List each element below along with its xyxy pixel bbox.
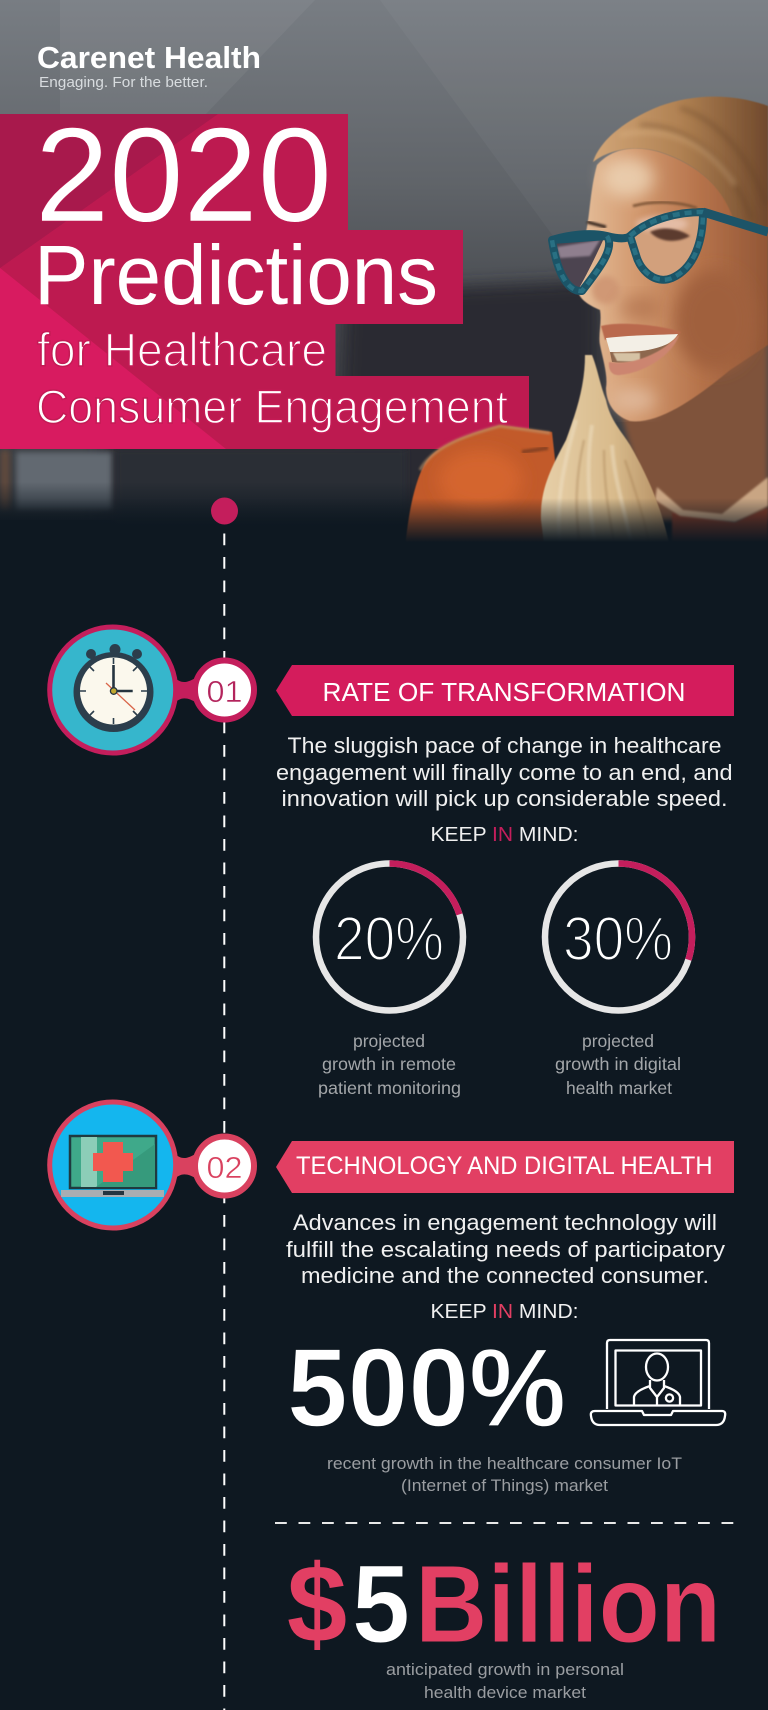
caption: digital health market: health market [566, 1078, 672, 1098]
keep in mind label 1: KEEP IN MIND: [430, 823, 578, 846]
ring chart: 30%: 30% [563, 905, 673, 974]
section 01 description: innovation will pick up considerable speed. [282, 786, 728, 811]
number badge 01 [195, 660, 254, 720]
header photo background [0, 0, 768, 560]
title text: Predictions [34, 228, 438, 322]
section 02 description: Advances in engagement technology will [293, 1210, 717, 1235]
number badge 02: 02 [206, 1150, 242, 1185]
title text: Consumer Engagement [36, 380, 508, 433]
caption: personal health device market [386, 1661, 624, 1702]
section 02 description: medicine and the connected consumer. [301, 1263, 709, 1288]
caption: remote patient monitoring: projected [353, 1031, 425, 1051]
blonde hair [540, 354, 668, 540]
caption: digital health market: growth in digital [555, 1054, 681, 1074]
ring chart: 20% [316, 864, 463, 1010]
caption: IoT market [327, 1455, 682, 1495]
teal circle [50, 627, 176, 753]
section 02 description: fulfill the escalating needs of participatory [286, 1237, 725, 1262]
title text [34, 101, 508, 433]
big stat: $5 Billion: Billion [415, 1543, 721, 1666]
photo bottom fade [0, 498, 768, 572]
collar and right sweater [654, 476, 768, 538]
section 02 description [286, 1210, 725, 1288]
title pink block [0, 114, 529, 449]
title text: 2020 [35, 101, 332, 250]
big stat: $5 Billion: 5 [352, 1543, 410, 1666]
caption: remote patient monitoring: patient monitoring [318, 1078, 461, 1098]
logo: Carenet Health: Carenet Health [37, 40, 261, 75]
number badge 01: 01 [206, 674, 242, 709]
number badge 02 [195, 1136, 254, 1196]
hair top [593, 97, 768, 228]
caption: IoT market: (Internet of Things) market [401, 1477, 608, 1495]
smile [601, 324, 681, 375]
timeline start dot [211, 498, 238, 524]
section 01 description [276, 733, 732, 811]
logo: Carenet Health [37, 40, 261, 91]
ring chart: 20%: 20% [334, 905, 444, 974]
photo: smiling woman with glasses [404, 97, 768, 560]
icon: laptop with doctor [591, 1340, 725, 1425]
caption: remote patient monitoring: growth in remote [322, 1054, 456, 1074]
section 02 heading banner [276, 1141, 734, 1193]
caption: digital health market [555, 1031, 681, 1098]
caption: remote patient monitoring [318, 1031, 461, 1098]
section 02 heading banner: TECHNOLOGY AND DIGITAL HEALTH [296, 1152, 712, 1180]
face [578, 148, 768, 421]
timeline dashed line [223, 534, 225, 1710]
connector [172, 1151, 197, 1181]
caption: personal health device market: health device market [424, 1684, 586, 1702]
big stat: $5 Billion [287, 1543, 721, 1666]
title text: for Healthcare [37, 323, 327, 376]
section 01 description: The sluggish pace of change in healthcare [288, 733, 722, 758]
caption: personal health device market: anticipated growth in personal [386, 1661, 624, 1679]
section 01 heading banner: RATE OF TRANSFORMATION [322, 677, 686, 707]
orange sweater [406, 424, 556, 540]
logo: Carenet Health: Engaging. For the better. [39, 75, 208, 91]
icon: laptop with medical cross [61, 1136, 164, 1197]
section 02 badge with laptop icon [50, 1102, 254, 1228]
keep in mind label 2: KEEP IN MIND: [430, 1300, 578, 1323]
icon: stopwatch [74, 644, 154, 732]
big stat: $5 Billion: $ [287, 1543, 347, 1666]
ring chart: 30% [545, 864, 692, 1010]
neck and chest [620, 340, 768, 520]
connector [172, 675, 197, 705]
big stat: 500%: 500% [287, 1326, 566, 1450]
section 01 heading banner [276, 665, 734, 716]
blue circle [50, 1102, 176, 1228]
section 01 description: engagement will finally come to an end, and [276, 760, 732, 785]
glasses [552, 202, 768, 291]
caption: digital health market: projected [582, 1031, 654, 1051]
section 01 badge with stopwatch icon [50, 627, 254, 753]
caption: IoT market: recent growth in the healthcare consumer IoT [327, 1455, 682, 1473]
